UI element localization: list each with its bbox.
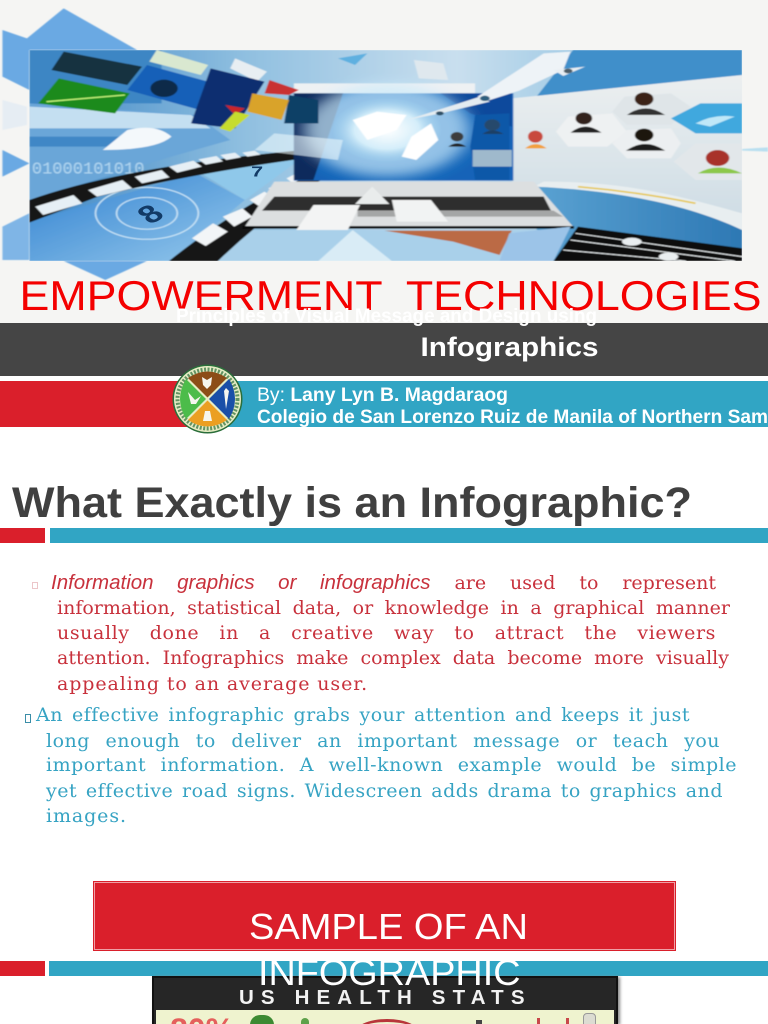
soft flare — [255, 133, 343, 160]
small green icon — [301, 1018, 309, 1024]
red ticks — [537, 1018, 569, 1024]
line 4: attention. Infographics make complex data become more visually — [57, 647, 729, 669]
lower rule: teal — [49, 961, 768, 976]
heading: What Exactly is an Infographic? — [12, 479, 692, 526]
line 3: important information. A well-known example would be simple — [46, 754, 737, 776]
left dark top — [49, 50, 162, 104]
school name: Colegio de San Lorenzo Ruiz de Manila of Northern Sam — [257, 407, 768, 428]
green icon — [250, 1015, 274, 1024]
bottom centre — [218, 230, 538, 261]
calendar card — [414, 60, 448, 80]
laptop lid — [294, 83, 475, 95]
dark icon — [476, 1020, 482, 1024]
film frame 8 — [29, 173, 245, 261]
guitar strip — [553, 227, 742, 261]
bullet — [32, 582, 38, 589]
subtitle: Infographics: Infographics — [420, 332, 598, 362]
people — [635, 92, 653, 106]
line 5: images. — [46, 805, 127, 827]
top icon — [338, 53, 367, 65]
line 1: Information graphics or infographics are used to represent — [51, 571, 716, 594]
film frame 7 — [204, 160, 294, 199]
laptop screen — [294, 93, 513, 181]
right sky — [534, 50, 742, 100]
film number 8: 8 — [129, 199, 171, 229]
plane — [478, 52, 571, 102]
red arc chart — [354, 1019, 420, 1024]
line 2: information, statistical data, or knowledge in a graphical manner — [57, 597, 730, 619]
film number 7: 7 — [251, 163, 263, 180]
film strip diagonal — [168, 180, 320, 261]
red sample banner — [94, 882, 675, 950]
dark subtitle band — [0, 323, 768, 376]
subtitle first line, partly hidden: Principles of Visual Message and Design using — [176, 305, 597, 327]
photo: blue technology scene — [29, 50, 742, 261]
author name: By: Lany Lyn B. Magdaraog — [257, 385, 508, 406]
hand and sleeve — [384, 231, 512, 255]
envelopes — [296, 205, 360, 230]
bullet — [25, 714, 31, 723]
heading rule: teal — [50, 528, 768, 543]
grey cup icon — [583, 1013, 596, 1024]
author credits — [257, 385, 768, 428]
blue arrow shape — [671, 103, 742, 133]
photo cards — [51, 52, 142, 85]
paragraph: effective infographic — [25, 704, 737, 827]
author bar: red segment — [0, 381, 190, 427]
heading line 2: INFOGRAPHIC — [258, 952, 520, 993]
right white panel — [512, 75, 742, 217]
title: Empowerment Technologies: EMPOWERMENT TECHNOLOGIES — [20, 272, 762, 319]
line 3: usually done in a creative way to attract the viewers — [57, 622, 716, 644]
decorative blue diamonds — [2, 8, 147, 280]
author bar: teal segment — [225, 381, 768, 427]
line 4: yet effective road signs. Widescreen adds drama to graphics and — [46, 780, 723, 802]
lower right floor — [534, 187, 742, 261]
binary band — [29, 103, 230, 200]
right streak — [742, 147, 768, 152]
sample infographic preview — [152, 976, 618, 1024]
line 5: appealing to an average user. — [57, 673, 368, 695]
lower rule: red — [0, 961, 45, 976]
heading line 1: SAMPLE OF AN — [249, 906, 528, 947]
line 1: An effective infographic grabs your attention and keeps it just — [36, 704, 690, 726]
photo: blue technology scene: 01000101010 — [32, 161, 144, 179]
subtitle text — [176, 305, 598, 362]
sample banner heading — [249, 906, 528, 993]
preview stats strip — [156, 1010, 614, 1024]
people hexagons — [556, 113, 627, 147]
preview title: US HEALTH STATS — [239, 986, 524, 1009]
paragraph: definition — [32, 571, 730, 695]
film strip horizontal — [29, 150, 296, 223]
hero banner: technology collage — [0, 0, 768, 323]
heading rule: red — [0, 528, 45, 543]
school seal logo — [172, 364, 242, 434]
line 2: long enough to deliver an important message or teach you — [46, 730, 720, 752]
keyboard — [245, 182, 573, 227]
